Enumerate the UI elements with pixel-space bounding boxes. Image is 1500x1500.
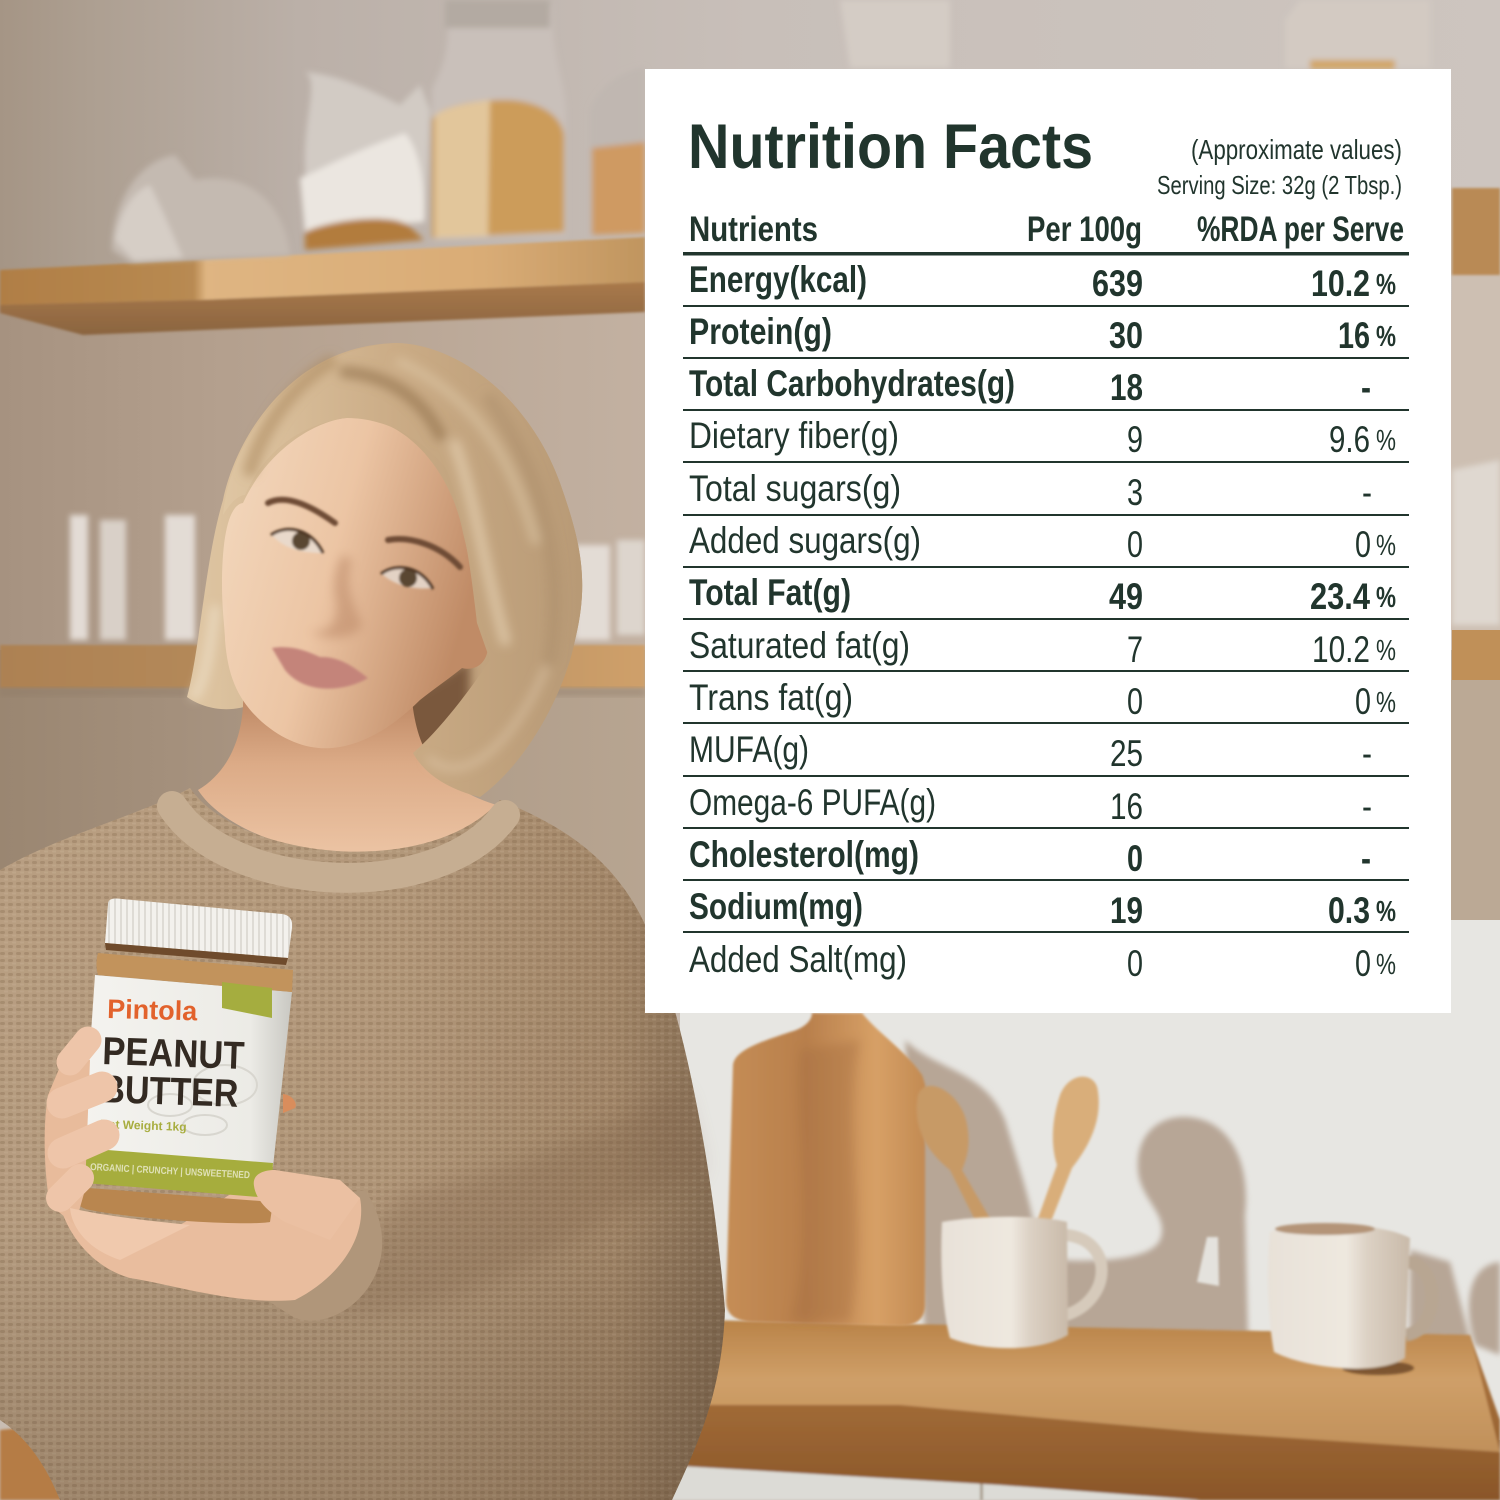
hair parting shade and highlights	[195, 362, 554, 768]
row: protein: 30	[1109, 315, 1143, 356]
jar base	[74, 1187, 273, 1223]
wooden counter	[0, 1320, 1500, 1500]
row: sodium: 19	[1110, 890, 1143, 931]
approximate values note: (Approximate values)	[1191, 134, 1402, 165]
row: dietary fiber	[689, 415, 1396, 460]
hair front strands	[223, 343, 582, 797]
row: added salt: 0	[1127, 943, 1143, 984]
row: sodium: Sodium(mg)	[689, 886, 863, 927]
glass bowl	[112, 155, 290, 262]
row: total fat	[689, 572, 1396, 617]
row: cholesterol: Cholesterol(mg)	[689, 834, 919, 875]
row: added sugars: %	[1376, 530, 1396, 562]
row: total fat: Total Fat(g)	[689, 572, 851, 613]
row: total sugars: Total sugars(g)	[689, 468, 901, 509]
row: sodium	[689, 886, 1396, 931]
table header: Per 100g	[1027, 210, 1142, 249]
row: total carbohydrates: -	[1361, 367, 1371, 408]
row: sodium: 0.3	[1328, 890, 1370, 931]
peanut butter band	[96, 953, 293, 992]
peanut butter jar: PEANUT	[102, 1030, 245, 1078]
row: omega-6 PUFA: -	[1362, 786, 1372, 827]
jars and bowls on top shelf	[112, 0, 1430, 262]
jars behind panel top right	[840, 0, 950, 68]
mug	[1268, 1223, 1432, 1375]
row: trans fat: 0	[1355, 681, 1371, 722]
row: total sugars	[689, 468, 1372, 513]
row: dietary fiber: %	[1376, 425, 1396, 457]
row: protein	[689, 311, 1396, 356]
row: total carbohydrates	[689, 363, 1371, 408]
row: added salt: Added Salt(mg)	[689, 939, 907, 980]
peanut illustration	[148, 1065, 257, 1135]
second shelf with cups	[0, 460, 1500, 696]
row: saturated fat: 10.2	[1312, 629, 1370, 670]
row: sodium: %	[1376, 896, 1396, 928]
hair back	[187, 343, 582, 797]
sweater cuff	[260, 1190, 382, 1321]
peeking fingertip	[283, 1094, 296, 1113]
table header: Nutrients	[689, 210, 818, 249]
white canister	[305, 72, 430, 232]
row: omega-6 PUFA: Omega-6 PUFA(g)	[689, 782, 936, 823]
row: added salt: %	[1376, 949, 1396, 981]
row: protein: Protein(g)	[689, 311, 832, 352]
peanut butter jar: Net Weight 1kg	[100, 1117, 187, 1134]
row: trans fat: 0	[1127, 681, 1143, 722]
peanut butter jar	[74, 899, 293, 1223]
row: cholesterol	[689, 834, 1371, 879]
wooden spoons	[917, 1077, 1099, 1224]
shadow window gap	[1197, 1237, 1219, 1286]
row: saturated fat	[689, 625, 1396, 670]
shadow under hair	[400, 660, 470, 758]
row: added sugars: 0	[1355, 524, 1371, 565]
row: total carbohydrates: Total Carbohydrates(g)	[689, 363, 1015, 404]
neck	[198, 690, 500, 855]
row: MUFA: 25	[1110, 733, 1143, 774]
row: MUFA	[689, 729, 1372, 774]
brand text: Pintola	[107, 994, 199, 1026]
row: total fat: 49	[1109, 576, 1143, 617]
peanut butter jar: BUTTER	[100, 1068, 239, 1116]
glass jar with pasta	[432, 5, 566, 240]
second glass jar	[590, 68, 645, 236]
peanut butter jar: ORGANIC | CRUNCHY | UNSWEETENED	[90, 1162, 250, 1181]
row: cholesterol: -	[1361, 838, 1371, 879]
woman holding a jar	[0, 343, 725, 1500]
lips	[272, 647, 368, 689]
row: total fat: %	[1376, 582, 1396, 614]
row: total fat: 23.4	[1310, 576, 1370, 617]
row: added sugars: 0	[1127, 524, 1143, 565]
dark rim	[105, 943, 288, 965]
holding hand	[62, 1175, 361, 1301]
right hand thumb and fingers	[254, 1170, 360, 1240]
serving size note: Serving Size: 32g (2 Tbsp.)	[1157, 170, 1402, 200]
row: MUFA: MUFA(g)	[689, 729, 809, 770]
wall shadows	[905, 1040, 1500, 1355]
row: total sugars: 3	[1127, 472, 1143, 513]
face	[222, 418, 488, 748]
row: cholesterol: 0	[1127, 838, 1143, 879]
left hand fingers	[45, 1040, 360, 1260]
row: trans fat	[689, 677, 1396, 722]
row: omega-6 PUFA: 16	[1110, 786, 1143, 827]
row: protein: %	[1376, 321, 1396, 353]
row: trans fat: Trans fat(g)	[689, 677, 853, 718]
row: total sugars: -	[1362, 472, 1372, 513]
table header	[689, 210, 1404, 249]
table header: %RDA per Serve	[1197, 210, 1404, 249]
row: saturated fat: Saturated fat(g)	[689, 625, 910, 666]
sweater collar	[172, 806, 505, 878]
top shelf	[0, 188, 1500, 335]
row: saturated fat: 7	[1127, 629, 1143, 670]
row: added sugars: Added sugars(g)	[689, 520, 921, 561]
row: MUFA: -	[1362, 733, 1372, 774]
title: Nutrition Facts	[688, 112, 1093, 182]
row: dietary fiber: 9	[1127, 419, 1143, 460]
row: total carbohydrates: 18	[1110, 367, 1143, 408]
row: energy: %	[1376, 269, 1396, 301]
green band	[82, 1148, 273, 1198]
jar lid	[105, 899, 292, 958]
row: dietary fiber: Dietary fiber(g)	[689, 415, 899, 456]
row: added sugars	[689, 520, 1396, 565]
organic tag	[222, 982, 272, 1018]
cutting board	[726, 1013, 927, 1326]
nose shadow	[308, 555, 362, 638]
row: protein: 16	[1338, 315, 1370, 356]
row: energy	[689, 259, 1396, 304]
row: added salt	[689, 939, 1396, 984]
row: energy: Energy(kcal)	[689, 259, 867, 300]
eyes	[271, 529, 433, 589]
sleeve shadow	[320, 1090, 700, 1313]
row: added salt: 0	[1355, 943, 1371, 984]
row: energy: 10.2	[1311, 263, 1370, 304]
eyebrows	[268, 500, 460, 567]
row: energy: 639	[1092, 263, 1143, 304]
row: dietary fiber: 9.6	[1329, 419, 1370, 460]
mug with spoons	[941, 1217, 1102, 1348]
row: saturated fat: %	[1376, 635, 1396, 667]
row: omega-6 PUFA	[689, 782, 1372, 827]
sweater	[0, 788, 725, 1500]
jar label	[83, 975, 292, 1167]
row: trans fat: %	[1376, 687, 1396, 719]
nutrition facts panel	[645, 69, 1451, 1013]
